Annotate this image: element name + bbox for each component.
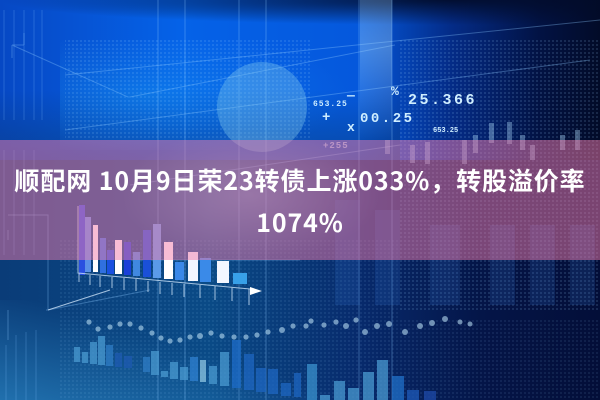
floating numbers: +255 — [323, 141, 349, 151]
floating numbers: 653.25 — [433, 127, 458, 135]
axis arrow — [250, 287, 262, 295]
floating numbers: x — [347, 120, 355, 135]
title: 1074% — [256, 204, 344, 240]
title — [14, 162, 586, 240]
floating numbers — [313, 84, 477, 151]
floating numbers: — — [346, 88, 355, 103]
translucent circle — [217, 62, 307, 152]
lower dot line — [86, 316, 473, 344]
candlesticks row — [385, 122, 580, 164]
floating numbers: + — [322, 110, 330, 126]
floating numbers: 653.25 — [313, 100, 348, 109]
translucent title band — [0, 140, 600, 260]
chart axes and arrow — [48, 206, 250, 310]
right faint columns — [335, 200, 595, 305]
left vertical stripes — [4, 10, 42, 400]
light column — [360, 0, 392, 140]
floating numbers: 00.25 — [360, 111, 415, 127]
floating numbers: % — [391, 84, 399, 99]
title: 顺配网 10月9日荣23转债上涨033%，转股溢价率 — [14, 162, 586, 198]
lower bar chart — [74, 336, 436, 400]
main bar chart — [79, 205, 247, 284]
floating numbers: 25.366 — [408, 92, 477, 109]
